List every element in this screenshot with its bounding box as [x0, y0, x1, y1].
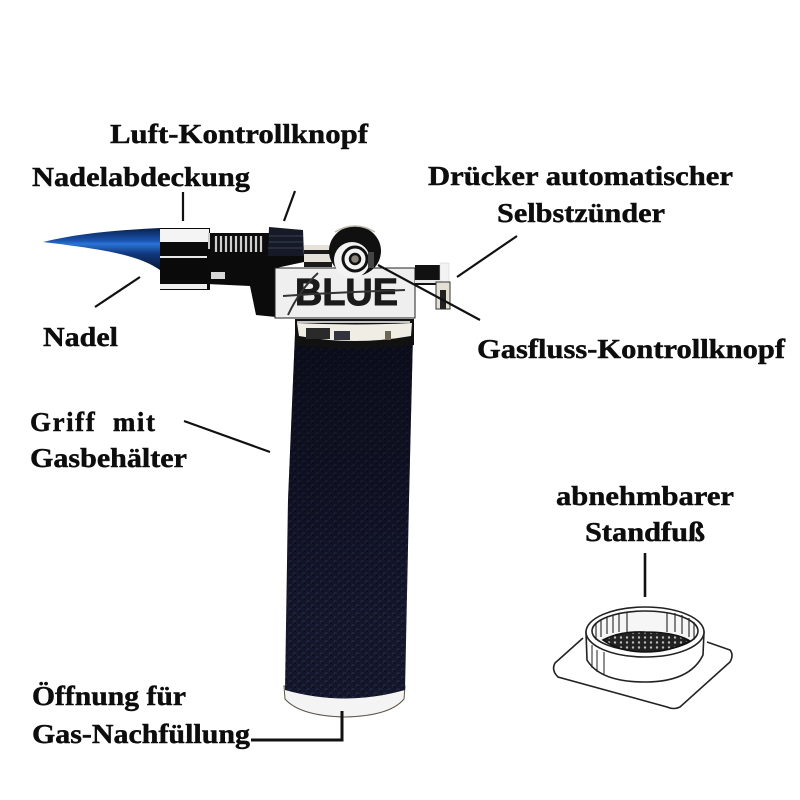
needle cover: [160, 228, 212, 290]
stand mesh floor: [603, 632, 690, 652]
removable stand drawing: [554, 607, 732, 708]
lower body block: [207, 256, 304, 317]
gas flow dial: [329, 226, 381, 278]
igniter button: [415, 263, 450, 309]
label: Griff mit: Griff mit: [30, 407, 155, 437]
label: Gasbehälter: Gasbehälter: [30, 443, 187, 473]
handle top collar: [295, 319, 414, 348]
stand ring rim: [586, 607, 704, 657]
gas refill cap: [284, 686, 405, 717]
stand ring inner wall: [592, 611, 698, 651]
leader lines: [95, 191, 645, 740]
label: Drücker automatischer: Drücker automatischer: [428, 161, 733, 191]
label: Nadel: Nadel: [43, 322, 119, 352]
spring: [210, 233, 270, 257]
air control knob: [268, 227, 304, 256]
flame needle: [43, 228, 160, 270]
logo plate: [275, 268, 415, 318]
stand ring body: [586, 632, 704, 682]
stand wall ribs: [596, 612, 694, 640]
label: Nadelabdeckung: Nadelabdeckung: [32, 162, 251, 192]
label: Öffnung für: Öffnung für: [32, 681, 186, 711]
torch handle with knurled grip: [285, 334, 413, 698]
stand ring outer ribs: [592, 645, 604, 674]
label: Gas-Nachfüllung: Gas-Nachfüllung: [32, 719, 251, 749]
connecting rods: [304, 245, 332, 267]
BLUE logo text: BLUE: [295, 272, 398, 314]
label: Selbstzünder: Selbstzünder: [497, 198, 665, 228]
stand base plate: [554, 638, 732, 708]
body highlight: [211, 272, 225, 279]
label: abnehmbarer: abnehmbarer: [556, 481, 734, 511]
label: Luft-Kontrollknopf: Luft-Kontrollknopf: [110, 119, 369, 149]
label: Gasfluss-Kontrollknopf: Gasfluss-Kontrollknopf: [477, 334, 786, 364]
label: Standfuß: Standfuß: [585, 517, 705, 547]
torch photo: [43, 226, 450, 717]
